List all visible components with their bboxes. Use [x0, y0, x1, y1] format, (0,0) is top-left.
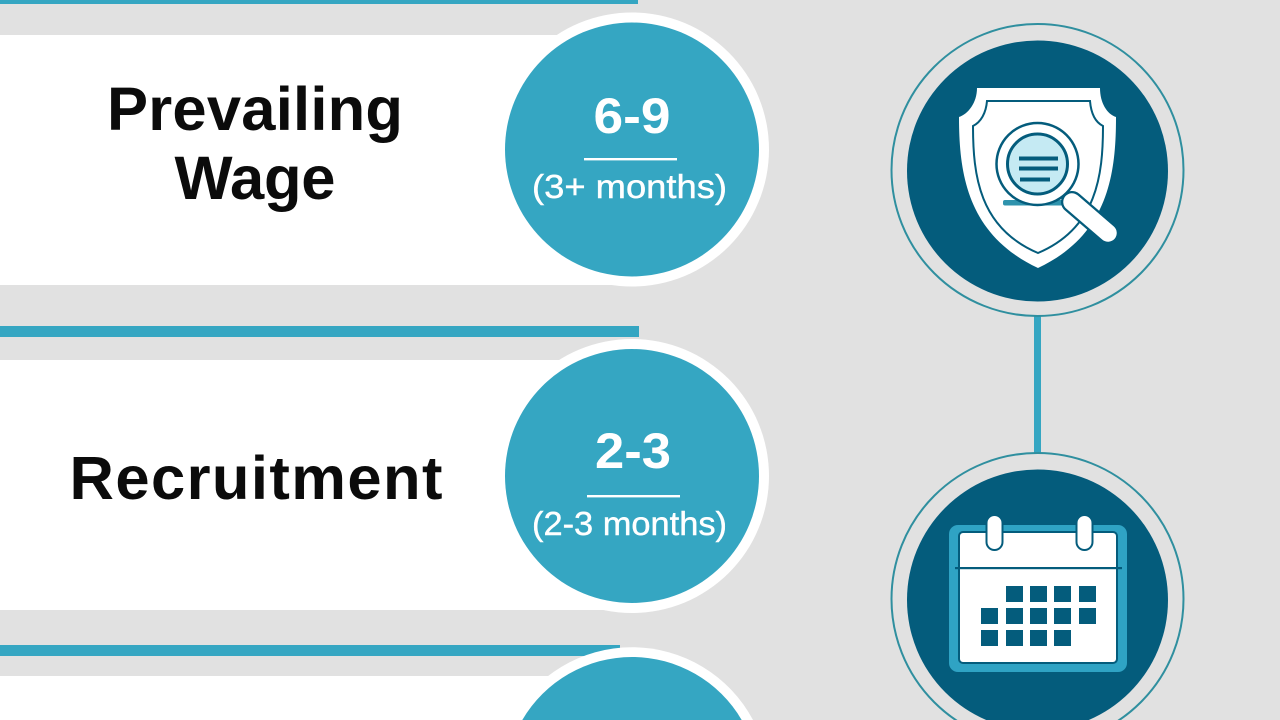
- duration badge: 2-3: 2-3: [595, 423, 671, 479]
- heading: Recruitment: Recruitment: [70, 444, 442, 513]
- calendar day grid: [981, 586, 1096, 646]
- duration badge: 2-3: (2-3 months): [532, 505, 727, 542]
- heading: Prevailing Wage: [107, 75, 403, 213]
- heading: Prevailing Wage: Wage: [174, 144, 336, 213]
- panel: recruitment step: [0, 326, 769, 613]
- duration badge: cropped: [511, 647, 753, 720]
- duration badge: 6-9: 6-9: [594, 88, 670, 144]
- duration badge: 6-9: [495, 12, 769, 286]
- icon: shield with magnifying glass: [892, 24, 1184, 316]
- heading: Prevailing Wage: Prevailing: [107, 75, 403, 144]
- icon: calendar: [892, 453, 1184, 720]
- panel: prevailing wage step: [0, 0, 769, 286]
- duration badge: 6-9: (3+ months): [532, 168, 727, 205]
- connector line between icons: [1034, 315, 1041, 454]
- panel: third step, cropped at the bottom edge: [0, 645, 753, 720]
- duration badge: 2-3: [495, 339, 769, 613]
